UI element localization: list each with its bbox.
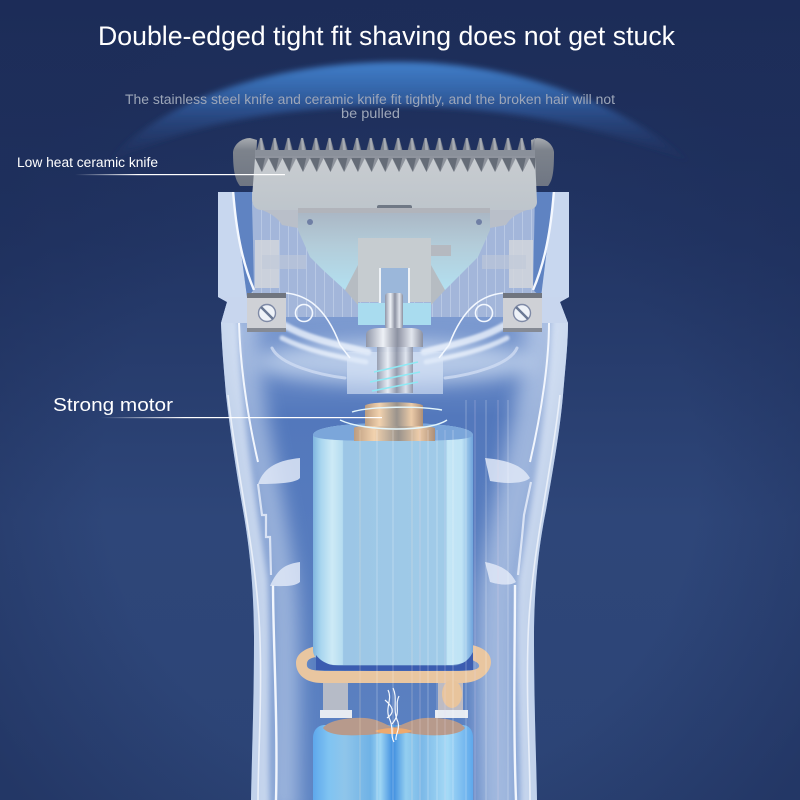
- cyan glow under block: [358, 303, 431, 325]
- small slot: [377, 205, 412, 210]
- blade mount shoulders: [262, 210, 298, 228]
- title: Double-edged tight fit shaving does not get stuck: [98, 21, 676, 51]
- shell top part: [218, 190, 569, 323]
- lower shell bowl bands: [272, 325, 517, 378]
- side pin: [431, 245, 451, 256]
- right bracket with screw: [503, 293, 542, 332]
- fibre tuft: [385, 688, 399, 742]
- outer band right: [531, 320, 566, 800]
- soft glow along left inner wall: [243, 330, 284, 800]
- white glow in upper shell: [255, 340, 535, 384]
- gold bracket ring back: [296, 645, 491, 683]
- rivets: [307, 219, 313, 225]
- outer band left: [224, 320, 256, 800]
- steel lower band: [255, 156, 535, 172]
- copper contact plate: [323, 718, 465, 735]
- shell inner walls: [228, 323, 560, 800]
- translucent body shell: [218, 192, 569, 800]
- spring lines around collar: [340, 407, 447, 429]
- terminals and batteries: [313, 680, 473, 800]
- glowing arc behind the blade: [105, 62, 690, 165]
- cage around spring: [347, 352, 443, 394]
- soft glow along right inner wall: [498, 330, 545, 800]
- subtitle: be pulled: [341, 106, 400, 121]
- callout: low heat ceramic knife: Low heat ceramic knife: [17, 155, 158, 170]
- faint pastel vertical lines: [360, 400, 508, 800]
- centre block: [358, 238, 431, 302]
- drive shaft: [366, 293, 423, 393]
- cyan spring: [370, 362, 420, 391]
- subtitle: [125, 92, 615, 121]
- motor can: [313, 423, 473, 665]
- dark base shadow: [316, 652, 473, 671]
- ceramic blade: [252, 158, 537, 218]
- motor gold collar: [354, 425, 435, 441]
- side clips: [258, 458, 530, 586]
- blade assembly: [233, 137, 554, 325]
- subtitle: The stainless steel knife and ceramic knife fit tightly, and the broken hair will not: [125, 92, 615, 107]
- motor: [296, 402, 491, 683]
- lower blade plate: [298, 208, 490, 290]
- trimmer illustration: [218, 138, 569, 800]
- stainless steel upper teeth: [255, 137, 535, 157]
- batteries: [313, 725, 473, 800]
- ceramic blade teeth: [255, 158, 535, 174]
- left bracket with screw: [247, 293, 286, 332]
- curved translucent arms: [286, 293, 503, 358]
- callout: strong motor: Strong motor: [53, 394, 173, 415]
- end caps of steel blade: [233, 138, 257, 186]
